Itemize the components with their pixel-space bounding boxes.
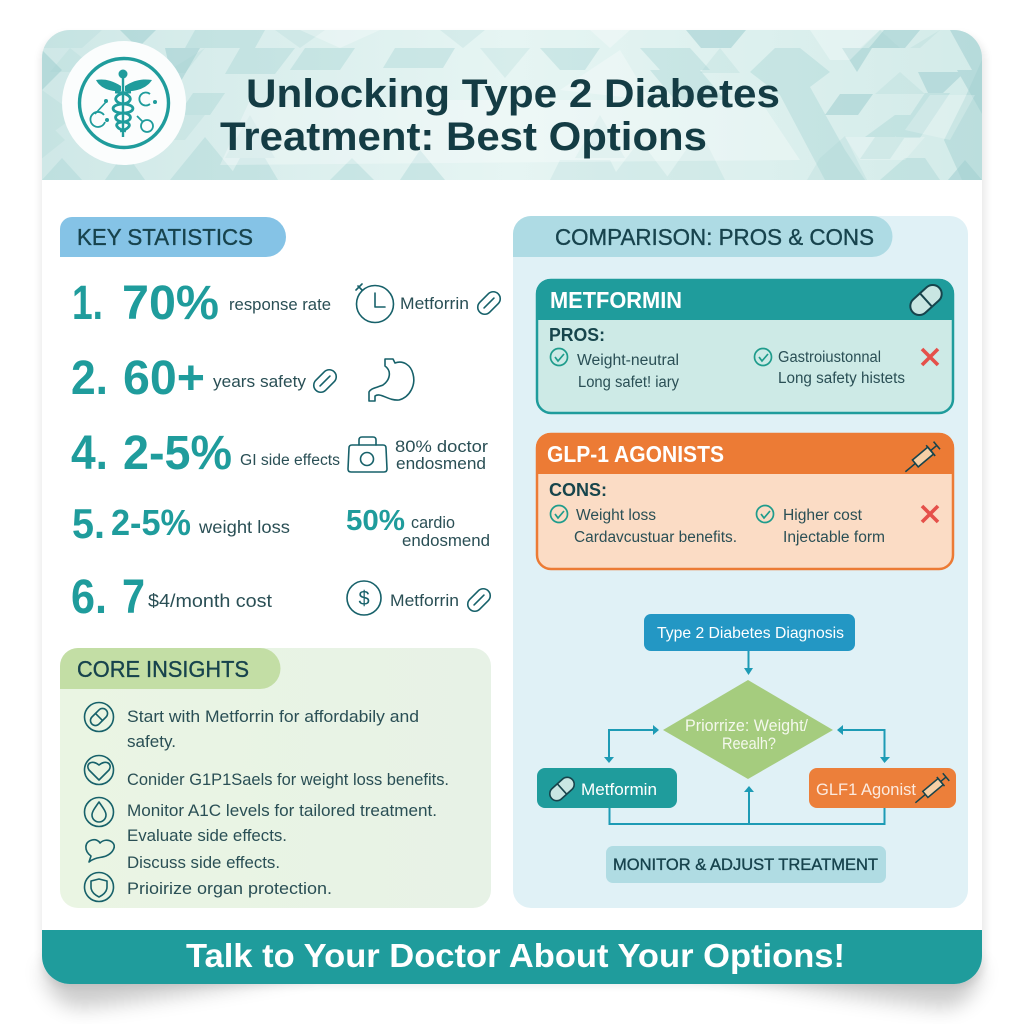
title [220, 72, 780, 159]
heading: key statistics [60, 217, 286, 257]
card: glp-1 agonists: GLP-1 AGONISTS [547, 441, 724, 467]
flow: decision diamond: Priorrize: Weight/ [685, 717, 808, 735]
stat row 3 [71, 427, 488, 480]
insight text [127, 708, 449, 898]
card: glp-1 agonists [536, 433, 954, 569]
stat row 5: Metforrin [390, 592, 459, 610]
stat row 5 [71, 571, 493, 624]
icon: dollar [347, 581, 381, 615]
icon: clock [356, 284, 394, 322]
heading: comparison: COMPARISON: PROS & CONS [555, 224, 874, 250]
card: metformin: Long safety histets [778, 370, 905, 387]
flow: metformin box [537, 768, 677, 808]
heading: core insights: CORE INSIGHTS [77, 656, 249, 682]
card: glp-1 agonists: Weight loss [576, 507, 656, 524]
flow: monitor box: MONITOR & ADJUST TREATMENT [613, 856, 878, 874]
card: glp-1 agonists: Injectable form [783, 529, 885, 546]
stat row 3: 2-5% [123, 427, 232, 480]
stat row 1: response rate [229, 296, 331, 314]
header geometric pattern [22, 30, 982, 180]
stat row 3: 4. [71, 427, 108, 480]
icon: syringe [901, 440, 941, 477]
card: glp-1 agonists: CONS: [549, 480, 607, 500]
stat row 4: 50% [346, 505, 405, 537]
stat row 3: endosmend [396, 454, 486, 473]
icon: chat heart [86, 840, 114, 862]
insight text: Evaluate side effects. [127, 827, 287, 845]
stat row 5: 7 [122, 571, 145, 624]
card: metformin: Long safet! iary [578, 374, 679, 391]
icon: capsule [547, 774, 577, 804]
insight text: Start with Metforrin for affordabily and [127, 708, 419, 726]
insight text: Conider G1P1Saels for weight loss benefits. [127, 771, 449, 789]
flow: monitor box [606, 846, 886, 883]
stat row 2: 60+ [123, 352, 205, 405]
card: metformin [536, 279, 954, 413]
icon: shield [84, 872, 114, 902]
stat row 4: weight loss [198, 517, 290, 537]
stat row 3: GI side effects [240, 452, 340, 469]
insight text: Discuss side effects. [127, 854, 280, 872]
stat row 4: 5. [72, 500, 105, 547]
insight text: safety. [127, 733, 176, 751]
icon: dollar: $ [358, 588, 370, 610]
flow: glp-1 box [809, 768, 956, 808]
card: metformin: METFORMIN [550, 287, 682, 313]
icon: bag [348, 437, 387, 472]
icon: red cross [922, 349, 938, 365]
arrow: decision to glp-1 [837, 725, 890, 763]
stat row 3: 80% doctor [395, 437, 488, 456]
stat row 2: 2. [71, 352, 108, 405]
icon: tablet [465, 586, 493, 614]
icon: capsule [907, 281, 945, 319]
icon: syringe [912, 772, 950, 807]
panel: comparison [513, 216, 968, 908]
stat row 1: Metforrin [400, 295, 469, 313]
icon: check [756, 506, 774, 522]
icon: red cross [922, 506, 938, 522]
icon: check [550, 348, 568, 366]
insight text: Monitor A1C levels for tailored treatment. [127, 802, 437, 820]
card: metformin: PROS: [549, 325, 605, 345]
icon: stomach [369, 359, 414, 401]
arrow: decision to metformin [604, 725, 659, 763]
flow: decision diamond: Reealh? [722, 735, 776, 753]
flow: glp-1 box: GLF1 Agonist [816, 781, 916, 799]
insight text: Prioirize organ protection. [127, 880, 332, 898]
stat row 1: 1. [72, 277, 103, 330]
icon: capsule [84, 702, 114, 732]
stat row 4: cardio [411, 514, 455, 532]
icon: heart [84, 756, 114, 784]
flowchart [537, 614, 956, 883]
card: glp-1 agonists: Higher cost [783, 507, 863, 524]
heading: core insights [60, 648, 280, 689]
stat row 5: 6. [71, 571, 107, 624]
card: metformin: Gastroiustonnal [778, 349, 881, 366]
heading: key statistics: KEY STATISTICS [77, 224, 253, 250]
flow: decision diamond [663, 680, 833, 779]
stat row 5: $4/month cost [148, 591, 272, 611]
card: glp-1 agonists: Cardavcustuar benefits. [574, 529, 737, 546]
title: Unlocking Type 2 Diabetes [246, 72, 780, 116]
flow: diagnosis box [644, 614, 855, 651]
stat row 1: 70% [122, 277, 219, 330]
panel: key statistics [60, 217, 503, 624]
stat row 2 [71, 352, 414, 405]
panel: core insights [60, 648, 491, 908]
flow: metformin box: Metformin [581, 781, 657, 799]
card: metformin: Weight-neutral [577, 352, 679, 369]
heading: comparison [513, 216, 892, 257]
title: Treatment: Best Options [220, 115, 707, 159]
header band [22, 30, 982, 180]
footer banner [42, 930, 982, 984]
stat row 4: 2-5% [111, 502, 191, 543]
icon: caduceus logo [62, 41, 186, 165]
stat row 4 [72, 500, 490, 550]
icon: check [754, 348, 772, 366]
arrow: diagnosis to decision [744, 651, 753, 675]
footer banner: Talk to Your Doctor About Your Options! [186, 937, 845, 974]
arrow: treatments back to decision [610, 786, 884, 824]
icon: check [550, 506, 568, 522]
icon: tablet [311, 367, 339, 395]
stat row 1 [72, 277, 503, 330]
flow: diagnosis box: Type 2 Diabetes Diagnosis [657, 625, 844, 642]
icon: drop [84, 798, 114, 826]
icon: tablet [475, 289, 503, 317]
stat row 2: years safety [213, 373, 307, 391]
stat row 4: endosmend [402, 531, 490, 550]
